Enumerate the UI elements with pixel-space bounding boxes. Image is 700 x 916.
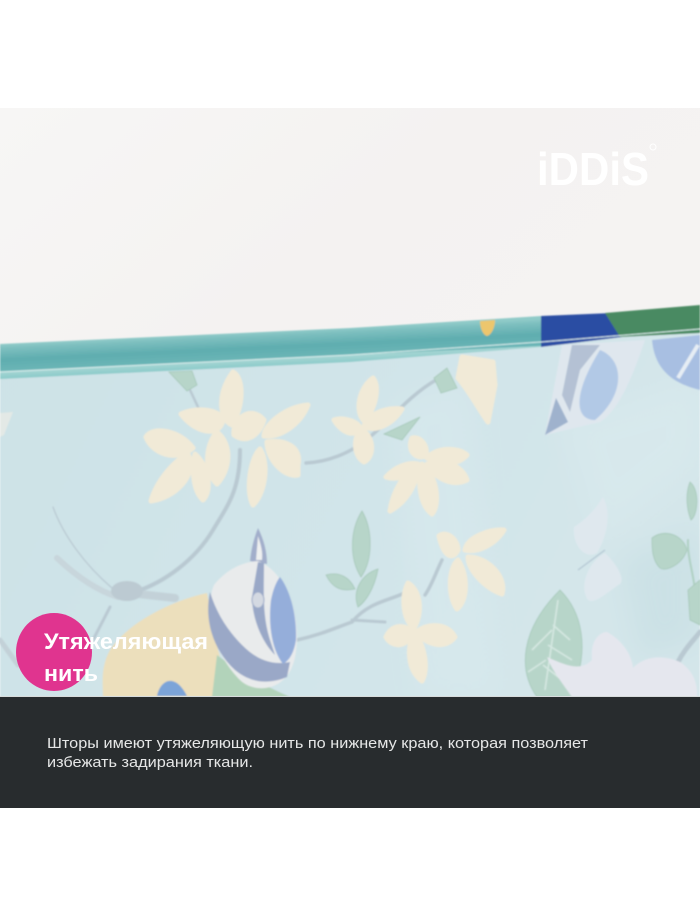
branches <box>0 380 700 665</box>
dark caption panel <box>0 696 700 808</box>
photo: wall background <box>0 108 700 348</box>
pink circle badge <box>16 613 92 691</box>
green leaves <box>169 368 700 697</box>
hem seam band <box>0 316 541 379</box>
pale flower fragment at left edge <box>0 412 13 437</box>
hem patterned blue segment <box>541 313 622 347</box>
logo IDDIS: iDDiS <box>537 143 649 195</box>
leaf veins <box>528 600 572 690</box>
fabric light folds <box>390 380 700 697</box>
heading: нить <box>44 661 98 686</box>
hem patterned green segment <box>605 305 700 337</box>
magnolia flower <box>547 632 697 697</box>
bird at hem <box>545 335 700 435</box>
photo: curtain fabric <box>0 305 700 697</box>
caption text <box>47 735 588 771</box>
knot on branch <box>111 581 143 601</box>
cream flowers <box>146 357 504 681</box>
hem yellow motif <box>480 320 495 336</box>
large blue tit bird <box>103 528 297 697</box>
caption text: избежать задирания ткани. <box>47 754 253 771</box>
butterfly <box>574 497 622 601</box>
heading <box>44 629 208 686</box>
hem stitching <box>0 329 700 372</box>
heading: Утяжеляющая <box>44 629 208 654</box>
caption text: Шторы имеют утяжеляющую нить по нижнему краю, которая позволяет <box>47 735 588 752</box>
top white margin <box>0 0 700 108</box>
